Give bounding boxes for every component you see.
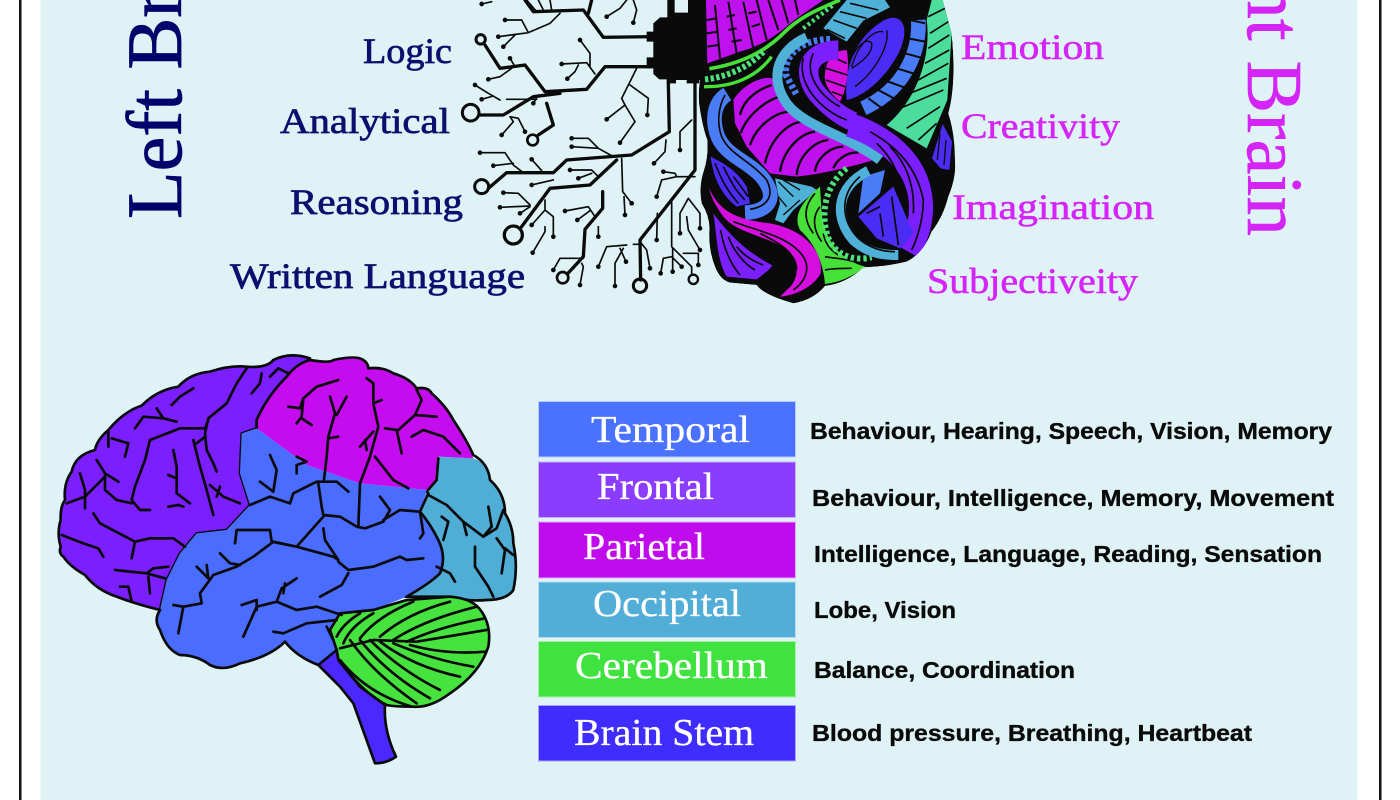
swirl lower left indigo [711, 157, 750, 207]
trait: Emotion: Emotion [961, 27, 1104, 67]
functions: Temporal: Behaviour, Hearing, Speech, Vision, Memory [810, 418, 1332, 444]
bar: Cerebellum [538, 642, 796, 697]
swirl mint stripe [887, 0, 952, 148]
circuit chip connector [647, 0, 700, 83]
trait: Written Language: Written Language [230, 256, 525, 296]
bar: Cerebellum: Cerebellum [575, 645, 768, 687]
bar: Parietal: Parietal [583, 526, 705, 568]
swirl magenta ribbon [709, 188, 821, 297]
swirl green swirl [797, 187, 865, 284]
functions: Occipital: Lobe, Vision [814, 597, 956, 623]
swirl purple ribbon [802, 50, 923, 252]
swirl blue stripes [863, 20, 918, 108]
brain: brain stem [318, 650, 396, 763]
trait: Imagination: Imagination [952, 187, 1154, 227]
functions: Parietal: Intelligence, Language, Reading, Sensation [814, 541, 1322, 567]
brain: temporal lobe [157, 428, 443, 668]
circuit left hemisphere [462, 0, 700, 292]
swirl small magenta [825, 50, 848, 102]
brain: parietal lobe [257, 357, 473, 490]
trait: Creativity: Creativity [961, 106, 1120, 146]
trait: Logic: Logic [363, 31, 452, 71]
swirl left blue ribbon [714, 94, 770, 213]
swirl inner teal [841, 171, 898, 255]
brain: occipital lobe [405, 457, 516, 600]
brain: frontal lobe [59, 355, 310, 610]
left brain traits [230, 31, 525, 296]
right brain traits [927, 27, 1154, 301]
functions: Brain Stem: Blood pressure, Breathing, Heartbeat [812, 720, 1252, 746]
swirl big magenta [733, 78, 874, 177]
trait: Analytical: Analytical [280, 101, 450, 141]
bar: Occipital: Occipital [593, 583, 741, 625]
trait: Subjectiveity: Subjectiveity [927, 261, 1138, 301]
bar: Temporal [538, 402, 796, 457]
swirl right hemisphere [699, 0, 955, 303]
illustration: circuit and swirl brain [462, 0, 955, 303]
bar: Parietal [538, 522, 796, 578]
lobe functions list [810, 418, 1334, 746]
brain: cerebellum [330, 597, 489, 707]
swirl green tick ring [824, 168, 872, 259]
bar: Frontal: Frontal [597, 466, 714, 508]
swirl right indigo [932, 124, 952, 170]
bar: Brain Stem [538, 706, 796, 761]
brain: cortical folds [62, 368, 513, 640]
swirl magenta top [706, 0, 823, 63]
brain: cerebellum folds [337, 602, 487, 707]
functions: Frontal: Behaviour, Intelligence, Memory, Movement [812, 485, 1334, 511]
swirl blue tick ring [786, 39, 830, 95]
trait: Reasoning: Reasoning [290, 182, 463, 222]
functions: Cerebellum: Balance, Coordination [814, 657, 1075, 683]
legend: lobe colour bars [538, 402, 796, 761]
bar: Occipital [538, 582, 796, 638]
lobes brain illustration [59, 355, 516, 763]
swirl teal top [823, 0, 890, 42]
swirl green ribbons [704, 0, 840, 87]
swirl silhouette [699, 0, 955, 303]
swirl inner blue [858, 170, 885, 213]
swirl purple lower [713, 213, 772, 279]
bar: Brain Stem: Brain Stem [574, 712, 754, 754]
bar: Frontal [538, 462, 796, 518]
swirl heart [846, 18, 904, 100]
swirl teal ribbon [777, 37, 880, 160]
swirl teal small [775, 178, 817, 223]
bar: Temporal: Temporal [591, 409, 750, 451]
